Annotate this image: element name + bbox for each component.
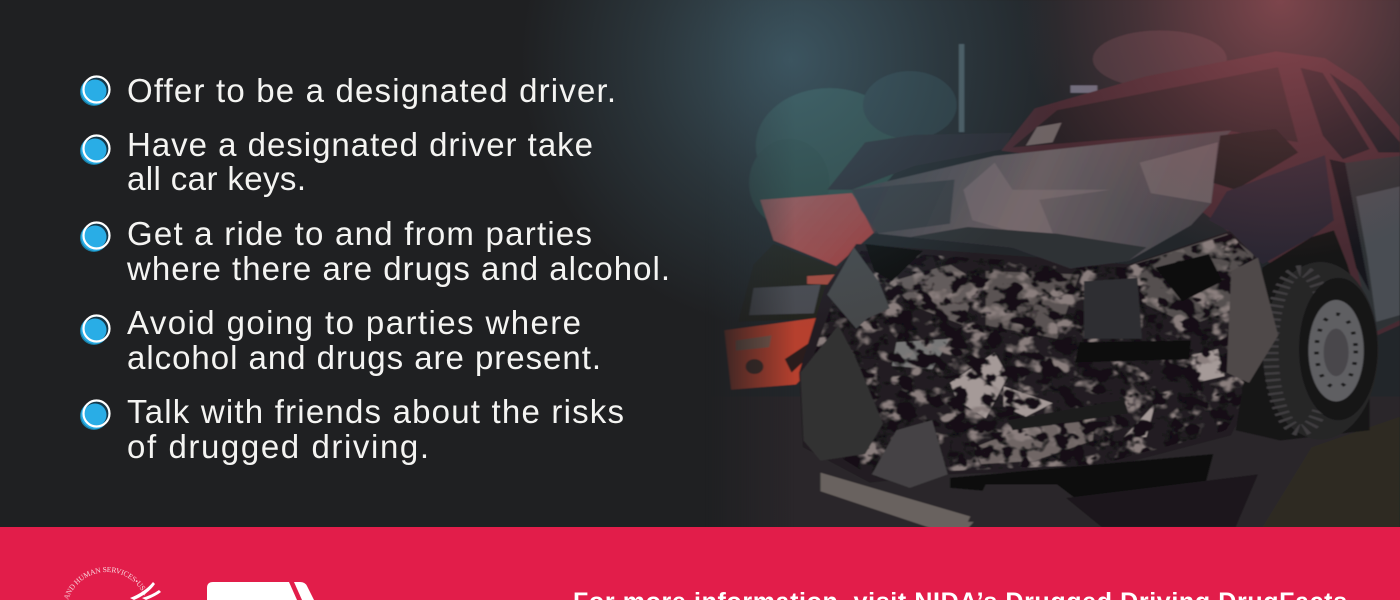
tips list <box>80 72 670 465</box>
crumpled engine texture <box>816 238 1245 472</box>
curb <box>821 473 977 529</box>
tip 4: alcohol and drugs are present. <box>127 339 601 376</box>
tip 3: Get a ride to and from parties <box>127 215 592 252</box>
bullet icon <box>80 136 110 165</box>
engine mass <box>799 230 1278 483</box>
roof <box>1001 51 1400 339</box>
road strip front shadow <box>1066 474 1258 527</box>
door panel <box>1344 156 1400 331</box>
NIDA logo mark <box>207 582 314 600</box>
tip 4: Avoid going to parties where <box>127 304 581 341</box>
tip 3: where there are drugs and alcohol. <box>126 250 670 287</box>
street sign <box>1071 85 1097 93</box>
red car <box>724 135 930 390</box>
red car hood <box>760 193 876 266</box>
debris patches <box>892 234 1254 464</box>
bullet icon <box>80 316 110 345</box>
tip 2 <box>80 126 593 197</box>
footer band <box>0 527 1400 600</box>
tip 4 <box>80 304 601 376</box>
crumpled hood <box>852 130 1231 268</box>
torn black plastic <box>872 420 948 488</box>
dark crumple texture <box>807 234 1274 478</box>
red car engine bay <box>758 244 838 320</box>
side bumper shard <box>1227 257 1278 383</box>
tip 5: of drugged driving. <box>127 428 429 465</box>
ground <box>768 397 1400 527</box>
tip 5 <box>80 393 624 465</box>
left fender <box>800 325 883 461</box>
tip 2: all car keys. <box>127 160 306 197</box>
dark engine cavities <box>865 244 1222 498</box>
tip 1: Offer to be a designated driver. <box>127 72 616 109</box>
right fender <box>1209 155 1334 264</box>
grass verge <box>1358 430 1400 527</box>
colour wash: teal and red glow <box>500 0 1400 527</box>
tip 2: Have a designated driver take <box>127 126 593 163</box>
bullet icon <box>80 222 110 252</box>
red car roof and windshield <box>828 135 930 190</box>
photo: crashed cars at night <box>700 0 1400 529</box>
HHS seal: AND HUMAN SERVICES•USA <box>64 567 146 600</box>
wheel rim <box>1308 300 1364 401</box>
wheel arch <box>1236 230 1370 440</box>
side windows <box>1300 68 1370 159</box>
night sky backdrop <box>730 36 1399 396</box>
windshield <box>1012 67 1298 147</box>
bullet icon <box>80 76 110 106</box>
bullet icon <box>80 400 110 430</box>
headlight wreck <box>827 247 890 329</box>
front tyre <box>1262 262 1379 439</box>
door pillar <box>1329 159 1370 291</box>
street pole <box>959 44 964 132</box>
red car bumper <box>725 317 827 390</box>
main car body <box>799 51 1400 525</box>
tip 3 <box>80 215 670 287</box>
trees <box>749 30 1227 227</box>
tip 5: Talk with friends about the risks <box>127 393 624 430</box>
